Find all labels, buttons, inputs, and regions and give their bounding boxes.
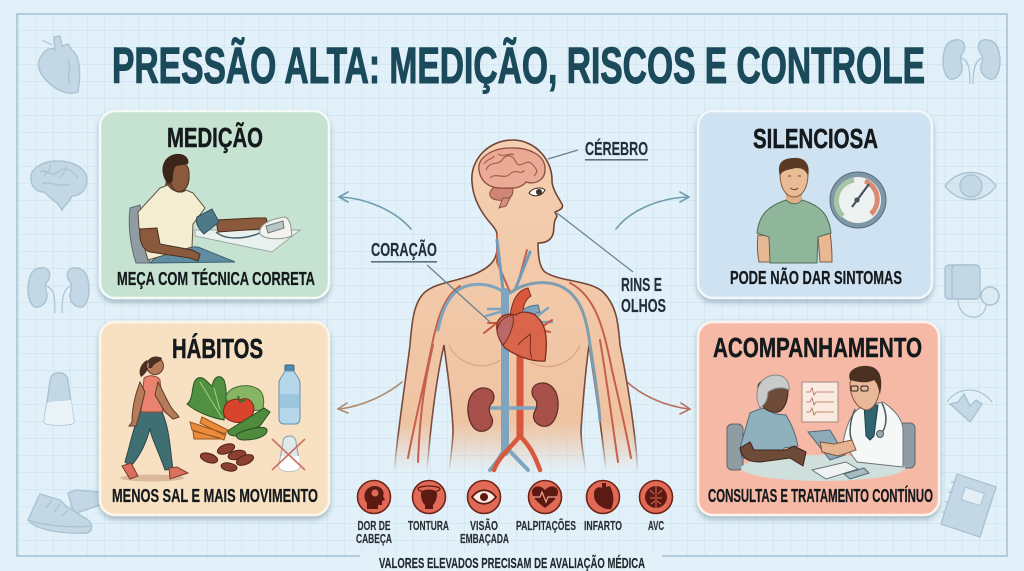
label: rins e olhos: OLHOS bbox=[621, 296, 666, 316]
arrow: to silenciosa bbox=[616, 192, 689, 229]
symptom: avc: AVC bbox=[648, 518, 664, 533]
illustration: heart bbox=[484, 288, 552, 361]
symptom: infarto bbox=[584, 480, 622, 533]
label: coração bbox=[371, 239, 490, 322]
panel: hábitos bbox=[100, 322, 329, 515]
illustration: brain bbox=[479, 148, 545, 208]
symptom: palpitações bbox=[516, 480, 576, 533]
arrow: to acompanhamento bbox=[626, 381, 690, 414]
background icon: pulse eye bbox=[947, 390, 992, 422]
symptom: visão embaçada bbox=[460, 480, 509, 546]
vein and aorta bbox=[490, 292, 540, 470]
caption: MEÇA COM TÉCNICA CORRETA bbox=[117, 268, 315, 289]
background icon: kidneys right bbox=[943, 40, 1000, 84]
icon: pressure gauge bbox=[830, 172, 886, 228]
icon: water bottle bbox=[279, 365, 300, 424]
central body figure bbox=[394, 140, 638, 472]
symptom: dor de cabeça: DOR DE bbox=[358, 518, 391, 533]
symptom: dor de cabeça bbox=[356, 480, 392, 546]
icon: crossed salt shaker bbox=[272, 436, 305, 471]
heading: acompanhamento: ACOMPANHAMENTO bbox=[713, 332, 922, 363]
label: rins e olhos: RINS E bbox=[621, 275, 662, 295]
symptom: avc bbox=[640, 480, 672, 533]
arrow: to medição bbox=[339, 192, 411, 229]
illustration: consultation bbox=[727, 366, 915, 481]
label: coração: CORAÇÃO bbox=[371, 239, 437, 260]
illustration: man bbox=[757, 158, 832, 263]
background icon: salt shaker bbox=[44, 373, 74, 425]
symptom: palpitações: PALPITAÇÕES bbox=[516, 518, 576, 533]
heading: medição: MEDIÇÃO bbox=[167, 122, 263, 153]
heading: hábitos: HÁBITOS bbox=[172, 333, 263, 364]
symptom: dor de cabeça: CABEÇA bbox=[356, 531, 392, 546]
background icon: notebook bbox=[941, 474, 996, 537]
illustration: woman walking bbox=[120, 356, 188, 482]
vessels: arms and neck bbox=[408, 235, 631, 462]
background icon: heart bbox=[39, 36, 80, 93]
background icon: sneakers bbox=[28, 490, 100, 533]
chest contour lines bbox=[449, 345, 580, 367]
symptom: tontura: TONTURA bbox=[408, 518, 449, 533]
symptom: visão embaçada: VISÃO bbox=[470, 518, 498, 533]
body outline bbox=[394, 140, 638, 472]
background icon: brain bbox=[31, 161, 87, 210]
panel: silenciosa bbox=[698, 111, 932, 298]
background icon: cuff gauge bbox=[945, 265, 999, 317]
illustration: eye bbox=[529, 188, 545, 196]
heading: silenciosa: SILENCIOSA bbox=[753, 123, 878, 154]
panel: medição bbox=[100, 111, 329, 298]
illustration: kidneys bbox=[468, 383, 558, 431]
illustration: vegetables and beans bbox=[187, 377, 270, 472]
background icon: kidneys bbox=[28, 268, 89, 313]
illustration: man measuring blood pressure bbox=[129, 154, 300, 263]
label: rins e olhos bbox=[557, 213, 666, 316]
symptom: infarto: INFARTO bbox=[584, 518, 622, 533]
arrow: to hábitos bbox=[338, 382, 402, 413]
label: cérebro bbox=[548, 138, 648, 161]
symptom: tontura bbox=[408, 480, 449, 533]
symptom: visão embaçada: EMBAÇADA bbox=[460, 531, 509, 546]
caption: PODE NÃO DAR SINTOMAS bbox=[730, 267, 902, 288]
background icon: eye bbox=[945, 172, 996, 200]
panel: acompanhamento bbox=[698, 322, 939, 515]
caption: MENOS SAL E MAIS MOVIMENTO bbox=[112, 486, 318, 506]
label: cérebro: CÉREBRO bbox=[585, 138, 648, 159]
